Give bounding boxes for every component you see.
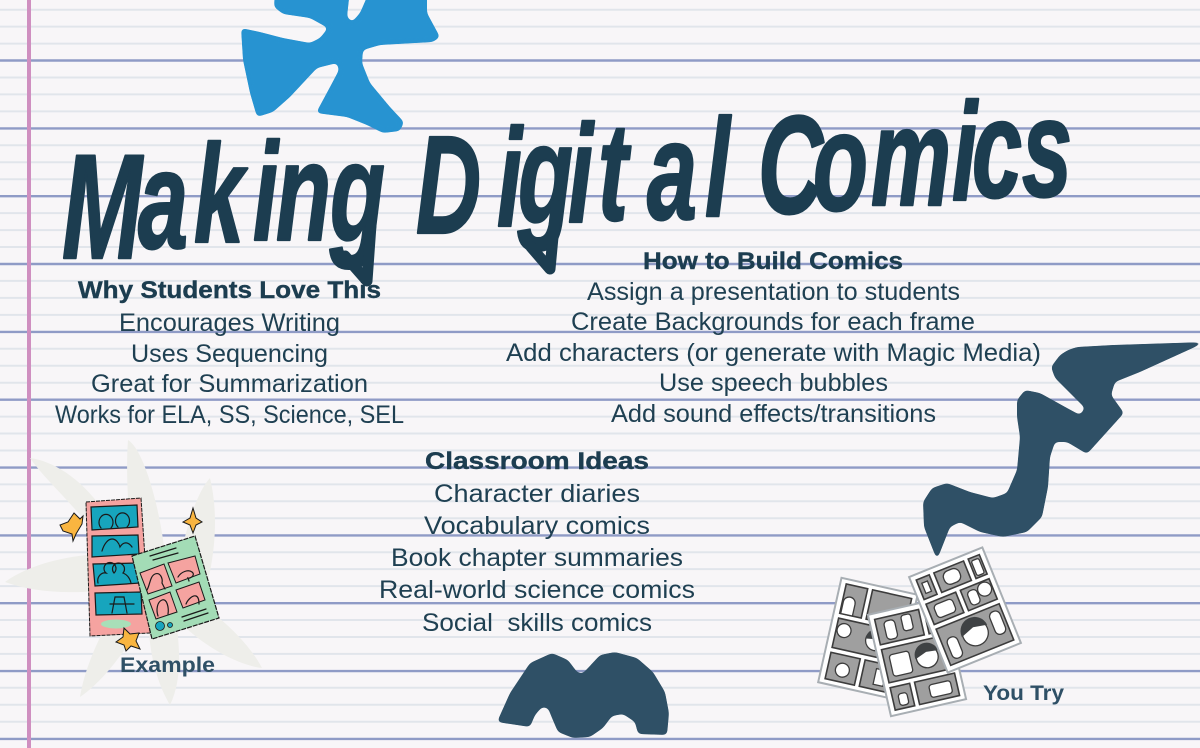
example illustration bbox=[5, 440, 262, 705]
you try illustration bbox=[818, 547, 1021, 716]
heading: how to build comics: How to Build Comics bbox=[643, 248, 903, 275]
label: you try: You Try bbox=[983, 682, 1064, 705]
decorative wavy blob bbox=[923, 342, 1200, 560]
text: add characters: Add characters (or generate with Magic Media) bbox=[506, 339, 1041, 367]
heading: why students love this: Why Students Love This bbox=[78, 277, 381, 304]
text: encourages writing: Encourages Writing bbox=[119, 309, 340, 337]
text: social skills comics: Social skills comics bbox=[422, 609, 652, 637]
title flourish: first g tail bbox=[345, 225, 371, 281]
text: works for subjects: Works for ELA, SS, Science, SEL bbox=[55, 401, 404, 429]
icon: sparkle bottom bbox=[116, 628, 140, 651]
text: real-world science comics: Real-world science comics bbox=[379, 576, 695, 604]
text: vocabulary comics: Vocabulary comics bbox=[424, 512, 650, 540]
text: uses sequencing: Uses Sequencing bbox=[131, 340, 328, 368]
decorative arch blob bbox=[497, 652, 669, 738]
panel: why students love this bbox=[55, 277, 404, 429]
label: example: Example bbox=[120, 654, 215, 677]
text: add sound effects: Add sound effects/transitions bbox=[611, 400, 936, 428]
comic sheet right bbox=[909, 547, 1021, 673]
icon: green comic page bbox=[132, 536, 219, 639]
text: character diaries: Character diaries bbox=[434, 480, 640, 508]
comic sheet left bbox=[818, 578, 918, 699]
decorative blue blob bbox=[241, 0, 440, 133]
text: great for summarization: Great for Summarization bbox=[91, 370, 368, 398]
comic sheet middle bbox=[868, 598, 966, 716]
icon: sparkle left bbox=[60, 513, 83, 541]
heading: classroom ideas: Classroom Ideas bbox=[425, 448, 649, 475]
panel: classroom ideas bbox=[379, 448, 695, 637]
title flourish: second g tail bbox=[531, 205, 556, 269]
text: use speech bubbles: Use speech bubbles bbox=[659, 369, 888, 397]
panel: how to build comics bbox=[506, 248, 1041, 428]
pale flower backdrop bbox=[5, 440, 262, 705]
text: assign a presentation: Assign a presentation to students bbox=[587, 278, 960, 306]
icon: sparkle right bbox=[183, 508, 202, 533]
icon: pink comic page bbox=[86, 498, 150, 636]
text: create backgrounds: Create Backgrounds for each frame bbox=[571, 308, 975, 336]
text: book chapter summaries: Book chapter summaries bbox=[391, 544, 683, 572]
title: Making Digital Comics bbox=[62, 70, 1072, 290]
